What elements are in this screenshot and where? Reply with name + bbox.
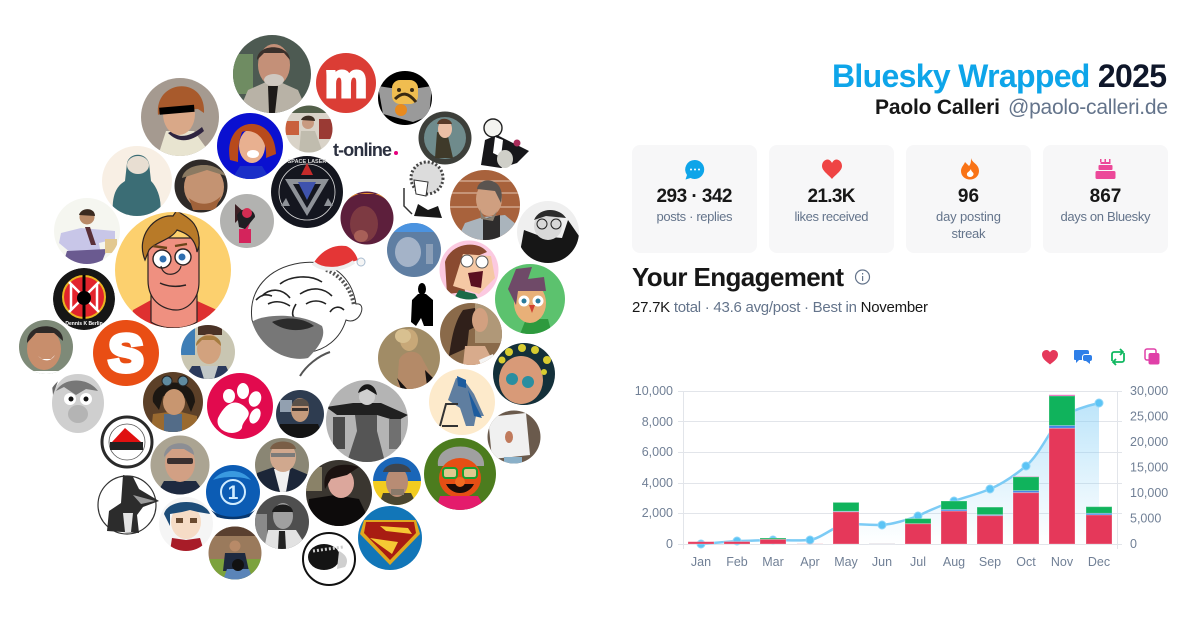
- avatar: man in cap with Ukrainian flag: [373, 457, 421, 505]
- avatar: black and white man with tie: [255, 495, 309, 549]
- avatar: scribbled sketch figure: [404, 162, 443, 218]
- avatar: older man with dark glasses: [150, 435, 210, 495]
- icon: speech bubble: [685, 160, 704, 180]
- panel: posts and replies: 293 · 342: [656, 186, 732, 207]
- panel: day posting streak: streak: [952, 226, 986, 241]
- grid lines: [678, 391, 1122, 549]
- avatar: man with glasses in dark: [276, 390, 324, 438]
- panel: days on Bluesky: [1043, 145, 1168, 253]
- avatar: orange S logo: [93, 320, 159, 386]
- month labels: Oct: [1016, 555, 1036, 569]
- right axis labels: 0: [1130, 537, 1137, 551]
- avatar: smiling man by river: [19, 320, 73, 374]
- avatar: tuxedo caricature: [481, 119, 529, 168]
- left axis labels: 10,000: [635, 384, 673, 398]
- avatar: wolf in suit: [98, 475, 159, 534]
- right axis labels: [1130, 384, 1168, 551]
- stacked bars: [688, 395, 1112, 544]
- profile name and handle: Paolo Calleri: [875, 96, 1000, 119]
- icon: suit silhouette: [411, 283, 433, 326]
- avatar: red m logo: [316, 53, 376, 113]
- avatar: round VBA badge: [102, 417, 152, 467]
- right axis labels: 5,000: [1130, 512, 1161, 526]
- avatar: caricature with santa hat: [251, 246, 365, 376]
- panel: day posting streak: [906, 145, 1031, 253]
- avatar: blurry brown dog: [340, 191, 394, 245]
- avatar: red m logo: m: [325, 55, 367, 108]
- engagement summary: 27.7K total · 43.6 avg/post · Best in November: [632, 299, 928, 316]
- avatar: seated person in office: [285, 105, 333, 153]
- month labels: Aug: [943, 555, 965, 569]
- panel: day posting streak: day posting: [936, 209, 1001, 224]
- avatar: old batman with walker: [429, 369, 495, 435]
- avatar: shouting cartoon woman: [439, 240, 499, 300]
- panel: likes received: 21.3K: [808, 186, 856, 207]
- left axis labels: 2,000: [642, 506, 673, 520]
- avatar: big cartoon man with glasses: [115, 210, 231, 328]
- icon: quote legend: [1145, 349, 1160, 364]
- profile name and handle: @paolo-calleri.de: [1008, 96, 1168, 119]
- icon: birthday cake: [1096, 159, 1116, 179]
- left axis labels: 6,000: [642, 445, 673, 459]
- icon: info: [856, 270, 870, 284]
- avatar cloud: [19, 35, 579, 585]
- avatar: orange S logo: S: [109, 325, 143, 383]
- title: Bluesky Wrapped 2025: [832, 58, 1167, 94]
- legend icons: [1042, 349, 1160, 365]
- avatar: moustache emoji: [378, 71, 432, 125]
- cumulative area and line: [697, 399, 1103, 548]
- avatar: TV studio man: [181, 325, 235, 379]
- avatar: dark haired woman in black: [306, 460, 372, 526]
- icon: heart: [822, 160, 842, 179]
- logo: t-online: t-online: [333, 140, 392, 160]
- icon: flame: [961, 158, 979, 180]
- avatar: nerd cartoon in dark ring: [418, 111, 472, 165]
- avatar: blue globe logo: [206, 465, 260, 519]
- icon: repost legend: [1112, 349, 1124, 365]
- avatar: superman shield: [358, 506, 422, 570]
- avatar: Frankenstein bride sketch: [303, 533, 355, 585]
- avatar: space laser corps patch: [271, 156, 343, 228]
- avatar: teal bearded portrait: [102, 146, 172, 216]
- icon: reply legend: [1074, 350, 1092, 364]
- avatar: smiling man in light jacket: [233, 35, 311, 113]
- heading: Your Engagement: Your Engagement: [632, 262, 844, 292]
- month labels: Jan: [691, 555, 711, 569]
- avatar: red muppet with green glasses: [424, 438, 496, 510]
- left axis labels: 8,000: [642, 415, 673, 429]
- right axis labels: 30,000: [1130, 384, 1168, 398]
- avatar: pink paw logo: [207, 373, 273, 439]
- left axis labels: 4,000: [642, 476, 673, 490]
- right axis labels: 15,000: [1130, 460, 1168, 474]
- month labels: [691, 555, 1110, 569]
- avatar: woman from behind: [378, 327, 440, 389]
- icon: like legend: [1042, 350, 1058, 364]
- right axis labels: 20,000: [1130, 435, 1168, 449]
- month labels: Feb: [726, 555, 748, 569]
- chart: monthly engagement: [635, 384, 1168, 569]
- month labels: Mar: [762, 555, 784, 569]
- panel: posts and replies: posts · replies: [656, 209, 733, 224]
- avatar: blue globe logo: 1: [228, 483, 239, 504]
- avatar: man before brick wall: [450, 170, 521, 240]
- avatar: gnome with flag: [220, 194, 274, 248]
- avatar: paper face on nose: [487, 410, 541, 465]
- avatar: man sitting with dog: [208, 526, 262, 580]
- avatar: red-haired woman on blue: [217, 113, 283, 179]
- panel: day posting streak: 96: [958, 186, 979, 207]
- panel: likes received: likes received: [794, 209, 868, 224]
- avatar: bald cartoon with yellow dots: [493, 343, 555, 405]
- avatar: Dennis K Berlin badge: [53, 268, 115, 330]
- avatar: bushy eyebrowed muppet in grey: [52, 374, 104, 433]
- avatar: space laser corps patch: SPACE LASER: [288, 159, 326, 165]
- avatar: dancing woman black and white: [326, 380, 408, 462]
- avatar: steampunk woman: [143, 372, 203, 432]
- panel: days on Bluesky: days on Bluesky: [1060, 209, 1151, 224]
- left axis labels: [635, 384, 673, 551]
- month labels: Jun: [872, 555, 892, 569]
- month labels: Jul: [910, 555, 926, 569]
- avatar: black and white woman: [517, 201, 579, 263]
- month labels: Dec: [1088, 555, 1110, 569]
- avatar: anime character: [159, 497, 213, 551]
- avatar: boy with censored eyes: [141, 78, 219, 156]
- panel: posts and replies: [632, 145, 757, 253]
- panel: likes received: [769, 145, 894, 253]
- month labels: Sep: [979, 555, 1001, 569]
- avatar: green background cartoon boy: [495, 264, 565, 334]
- panel: days on Bluesky: 867: [1090, 186, 1121, 207]
- avatar: man with necktie reclining: [54, 198, 120, 264]
- avatar: man with glasses, navy sweater: [255, 438, 309, 492]
- profile name and handle: [875, 96, 1168, 119]
- avatar: man with cap and beard: [174, 159, 228, 213]
- left axis labels: 0: [666, 537, 673, 551]
- month labels: Apr: [800, 555, 820, 569]
- month labels: May: [834, 555, 859, 569]
- avatar: Dennis K Berlin badge: Dennis K Berlin: [65, 321, 103, 327]
- avatar: blue tinted portrait: [387, 223, 441, 277]
- month labels: Nov: [1051, 555, 1074, 569]
- right axis labels: 10,000: [1130, 486, 1168, 500]
- avatar: woman in profile with dark hair: [440, 303, 502, 365]
- right axis labels: 25,000: [1130, 410, 1168, 424]
